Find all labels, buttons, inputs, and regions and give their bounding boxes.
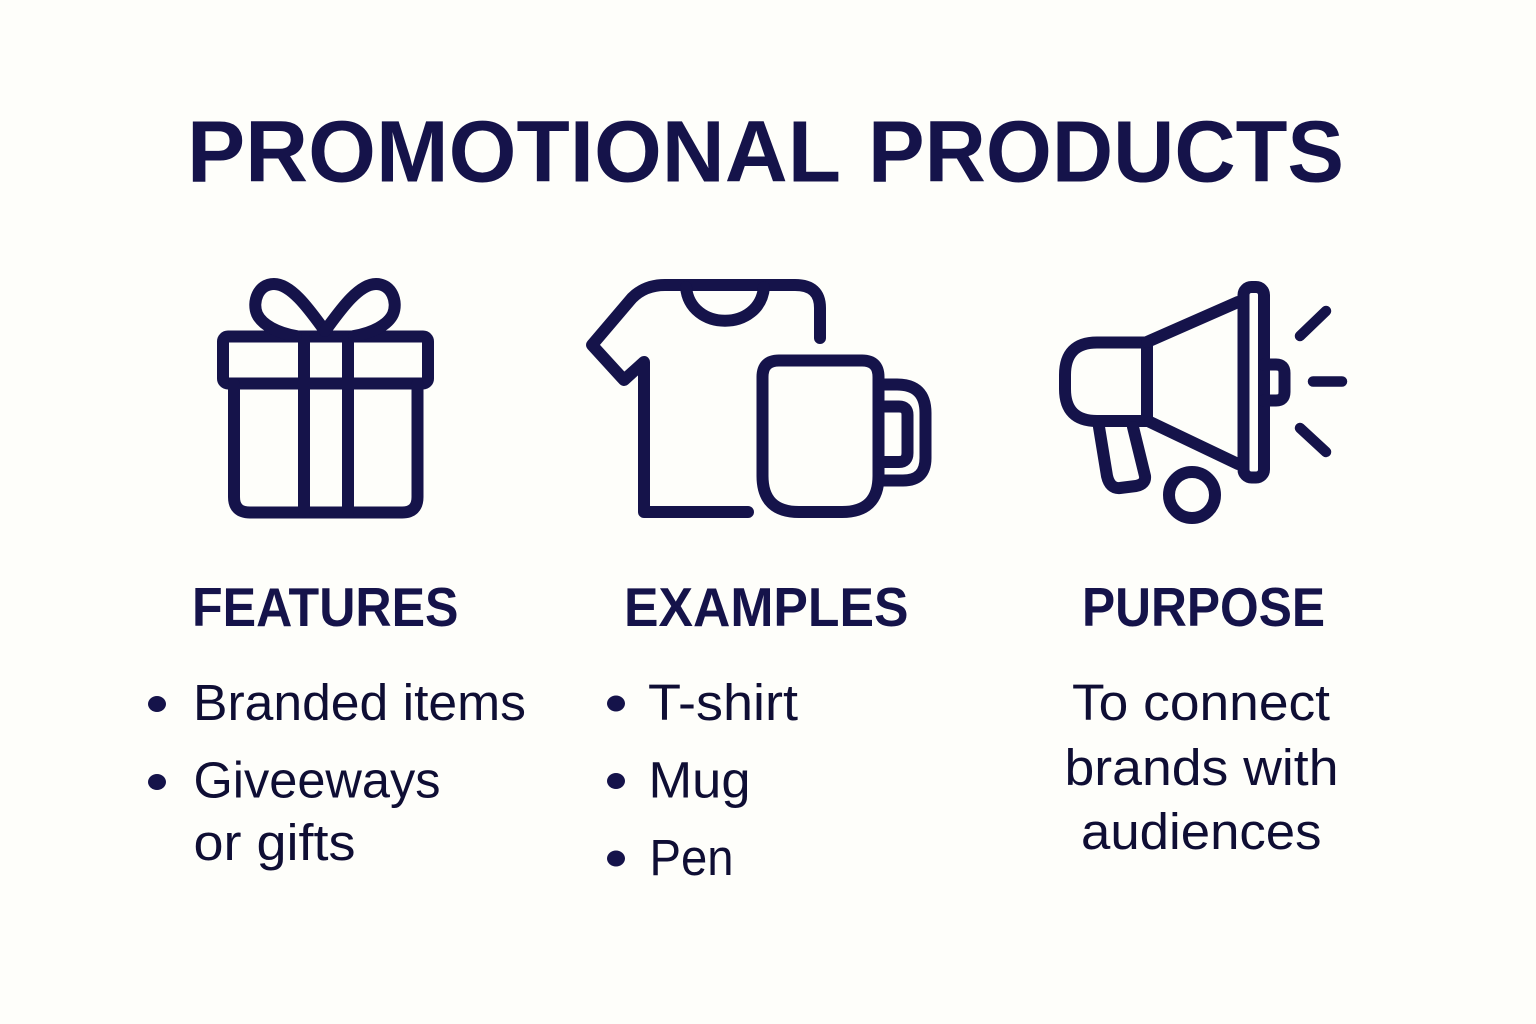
bullet: giveaways — [148, 774, 166, 790]
text: giveaways or gifts: Giveeways — [194, 752, 440, 808]
title — [187, 104, 1344, 200]
bullet: mug — [607, 773, 625, 789]
list: features — [148, 674, 526, 871]
heading: features: FEATURES — [192, 576, 458, 638]
bullet: t-shirt — [607, 696, 625, 712]
text: mug: Mug — [648, 752, 750, 808]
title: PRODUCTS — [868, 104, 1344, 200]
text: purpose: brands with — [1064, 739, 1338, 796]
text: purpose: To connect — [1072, 674, 1330, 731]
list: examples — [607, 674, 798, 886]
text: purpose — [1064, 674, 1338, 860]
icon: t-shirt and mug — [592, 285, 926, 512]
text: giveaways or gifts — [194, 752, 440, 871]
text: branded items: Branded items — [193, 674, 526, 731]
text: purpose: audiences — [1081, 803, 1322, 860]
icon: megaphone — [1065, 287, 1342, 518]
heading: examples: EXAMPLES — [624, 576, 908, 638]
text: giveaways or gifts: or gifts — [194, 814, 356, 871]
bullet: branded items — [148, 696, 166, 712]
icon: gift box — [223, 284, 428, 512]
heading: purpose: PURPOSE — [1082, 576, 1325, 638]
bullet: pen — [607, 850, 625, 866]
text: t-shirt: T-shirt — [648, 674, 798, 731]
title: PROMOTIONAL — [187, 104, 841, 200]
text: pen: Pen — [650, 829, 734, 886]
